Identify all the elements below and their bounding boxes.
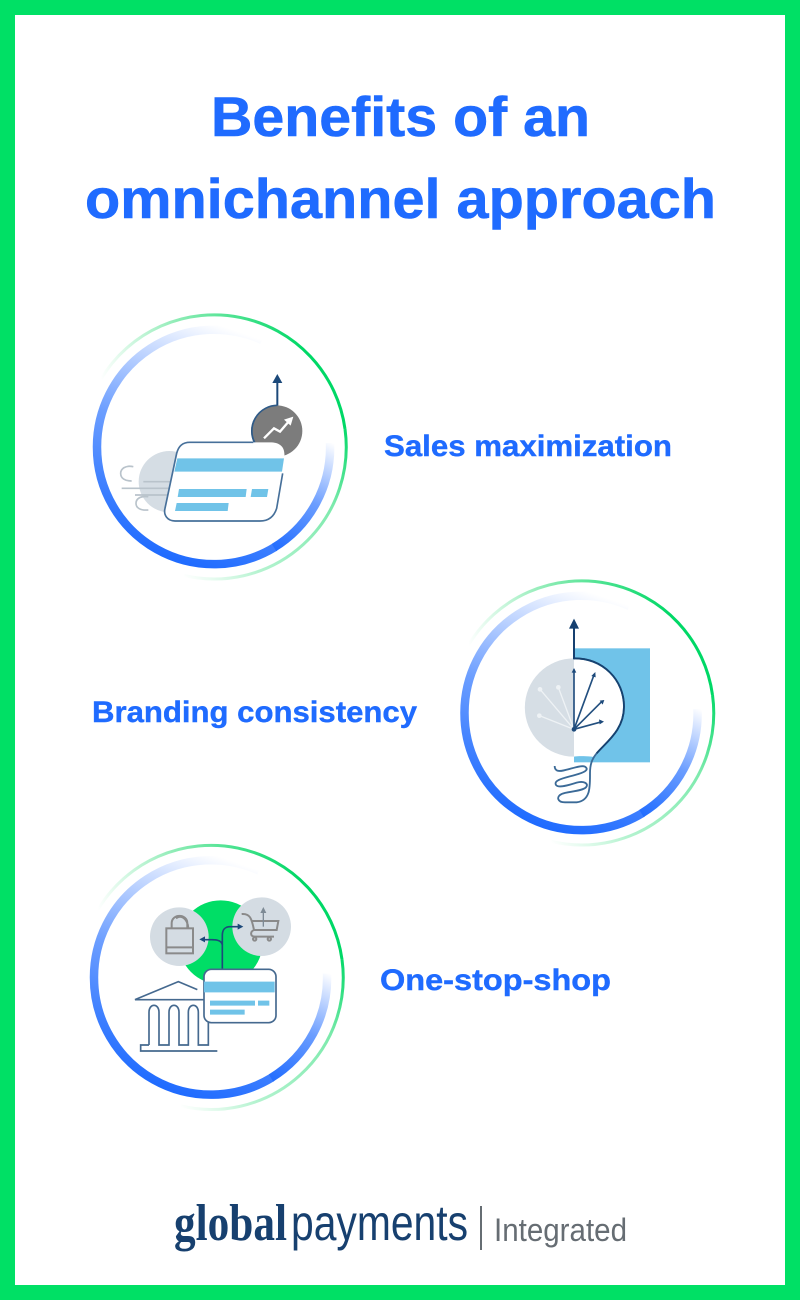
title: Benefits of an (211, 85, 590, 148)
logo: global payments integrated: payments (291, 1195, 468, 1251)
logo: global payments integrated (174, 1195, 627, 1252)
logo: global payments integrated: Integrated (494, 1212, 627, 1248)
label: sales maximization: Sales maximization (384, 430, 672, 463)
panel: sales maximization (97, 315, 346, 579)
ring: sales maximization (97, 315, 346, 579)
title (85, 85, 716, 230)
icon: speeding card with rising chart (121, 374, 302, 521)
logo: global payments integrated: global (174, 1195, 287, 1252)
label: branding consistency: Branding consistency (92, 696, 417, 729)
ring: branding consistency (464, 581, 714, 845)
title: omnichannel approach (85, 167, 716, 230)
label: one-stop-shop: One-stop-shop (380, 964, 611, 997)
icon: bank, card, bag and cart (130, 897, 291, 1051)
panel: branding consistency (464, 581, 714, 845)
icon: light bulb with rays (525, 619, 650, 802)
panel: one-stop-shop (94, 845, 343, 1110)
ring: one-stop-shop (94, 845, 343, 1110)
